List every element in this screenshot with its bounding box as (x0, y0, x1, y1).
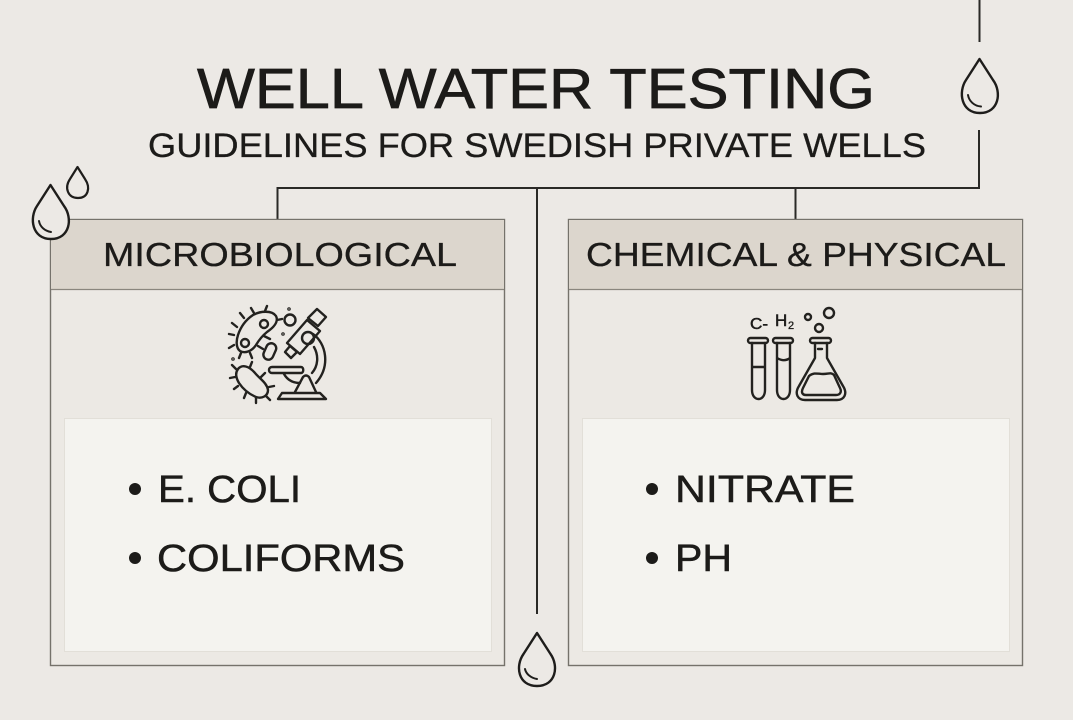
panel: chemical and physical (568, 220, 1022, 666)
bullet: E. coli: E. COLI (158, 469, 301, 511)
icon: test tubes and flask: C- (750, 316, 768, 333)
panel header: microbiological (51, 220, 504, 290)
content box: chemical and physical (582, 418, 1010, 652)
bullet: nitrate: NITRATE (675, 469, 855, 511)
icon: water drop bottom centre (519, 633, 555, 686)
bullet: coliforms: COLIFORMS (157, 538, 405, 580)
icon: test tubes and flask (748, 308, 845, 400)
icon: test tubes and flask: H (775, 311, 787, 330)
content box: microbiological (64, 418, 492, 652)
panel header: chemical and physical (569, 220, 1022, 290)
icon: large water drop left (33, 185, 69, 239)
icon: water drop top right (962, 59, 998, 113)
title: WELL WATER TESTING (197, 57, 875, 121)
connector lines (278, 0, 980, 614)
bullet: pH: PH (675, 538, 732, 580)
icon: small water drop left (67, 167, 88, 198)
panel header: microbiological: MICROBIOLOGICAL (103, 236, 457, 273)
panel: microbiological (50, 220, 504, 666)
icon: test tubes and flask: 2 (788, 320, 794, 332)
bullet: pH (646, 538, 732, 580)
icon: bacteria and microscope (229, 306, 326, 403)
panel header: chemical and physical: CHEMICAL & PHYSICAL (586, 236, 1006, 273)
subtitle: GUIDELINES FOR SWEDISH PRIVATE WELLS (148, 127, 926, 165)
